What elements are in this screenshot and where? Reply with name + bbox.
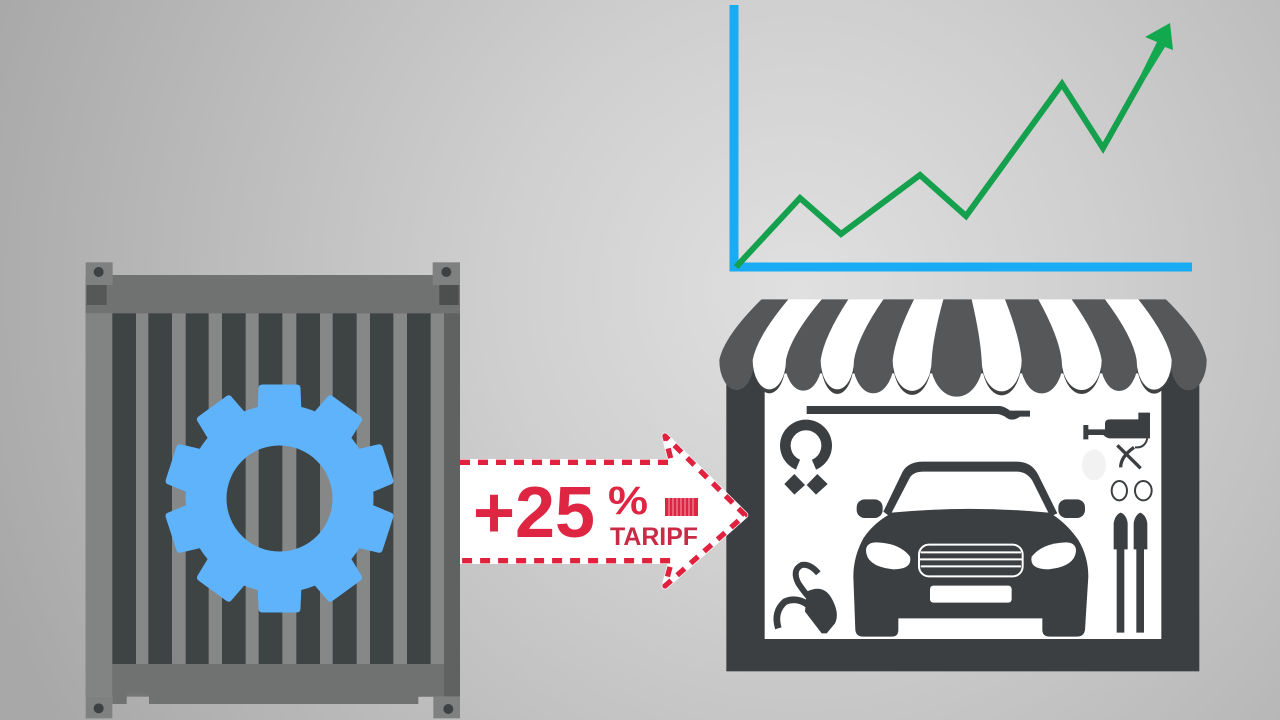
spray mist: [1082, 450, 1106, 480]
awning dark stripes: [721, 301, 1205, 395]
icon: two rings: [1112, 481, 1152, 500]
auto parts store: [721, 299, 1205, 671]
icon: blue gear: [164, 384, 395, 612]
tariff percentage: +25: [473, 473, 595, 553]
car grille: [919, 545, 1023, 576]
chart arrowhead: [1140, 23, 1173, 78]
icon: two tool bits: [1114, 513, 1147, 633]
arrow shape: [460, 435, 745, 587]
chart axes: [734, 5, 1192, 267]
tariff arrow: [460, 435, 745, 587]
tariff label: [473, 473, 698, 553]
container right post: [444, 305, 460, 697]
awning: [721, 299, 1205, 395]
car headlights: [866, 542, 1076, 569]
arrow white edge: [460, 436, 745, 586]
container left post: [86, 305, 112, 697]
barcode mark: [665, 498, 698, 516]
tariff word: TARIPF: [610, 523, 698, 551]
shipping container: [86, 262, 460, 718]
icon: hook tool: [777, 565, 837, 633]
chart rising line: [736, 77, 1143, 267]
container corner castings: [86, 262, 460, 718]
container panel: [112, 313, 444, 664]
line chart: [734, 5, 1192, 267]
icon: ring clamp: [784, 425, 828, 495]
container top beam: [86, 275, 460, 313]
icon: spray gun: [1083, 413, 1150, 468]
awning white stripes: [753, 299, 1172, 391]
store building: [726, 367, 1199, 671]
percent sign: %: [608, 479, 648, 523]
icon: long wrench bar: [807, 406, 1030, 420]
icon: car: [853, 462, 1088, 637]
car number plate: [930, 586, 1012, 603]
arrow dashed outline: [460, 436, 745, 586]
store interior: [765, 373, 1161, 639]
container bottom beam: [112, 664, 444, 704]
awning scallop shadow: [753, 360, 1172, 395]
container body: [86, 285, 460, 697]
container slots: [112, 313, 431, 664]
